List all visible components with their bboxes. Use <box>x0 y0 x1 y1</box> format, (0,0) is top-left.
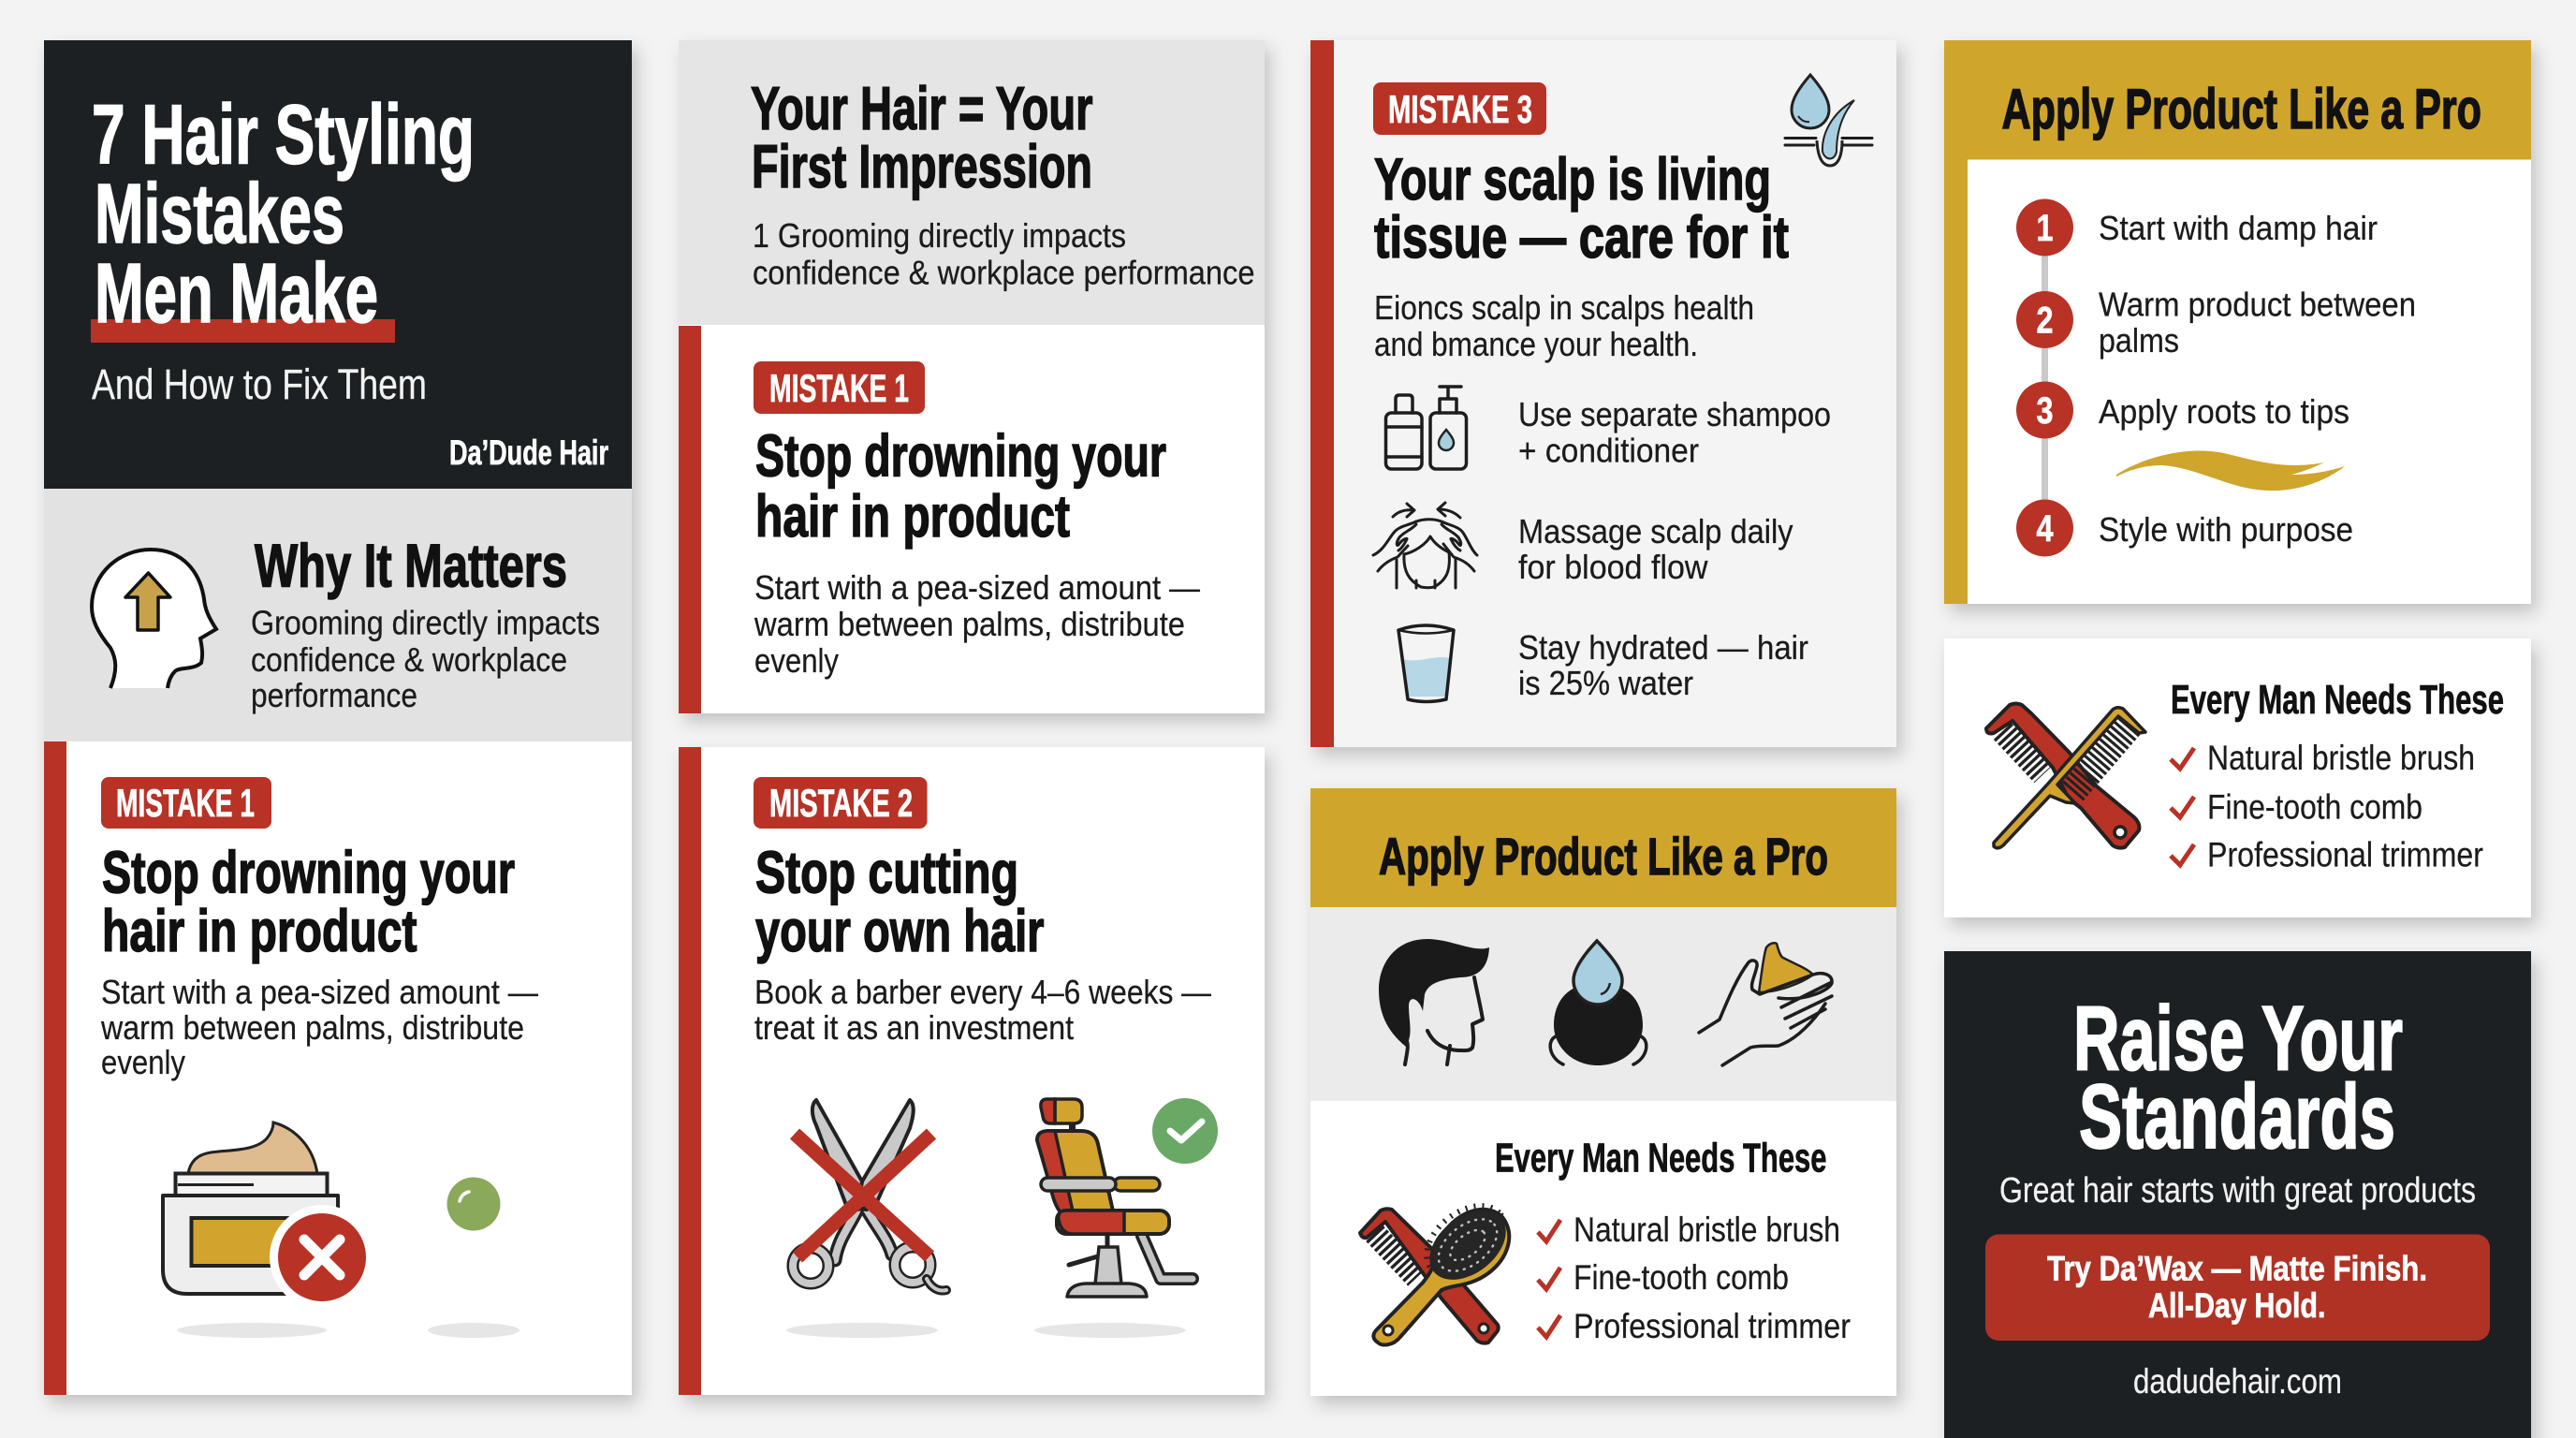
heading <box>102 841 515 964</box>
checklist: Natural bristle brush <box>2207 739 2475 777</box>
body text: warm between palms, distribute <box>100 1008 524 1047</box>
checklist <box>2171 739 2483 874</box>
panel: apply product steps <box>1944 40 2531 604</box>
body text <box>100 973 538 1081</box>
step text: Start with damp hair <box>2099 209 2378 247</box>
panel: first impression <box>679 40 1265 325</box>
icon: product in hand <box>1699 943 1832 1065</box>
badge <box>754 777 927 829</box>
icon: gold hair swoosh <box>2116 451 2345 491</box>
heading: First Impression <box>752 132 1092 200</box>
button: All-Day Hold. <box>2148 1286 2325 1325</box>
badge: MISTAKE 1 <box>116 781 255 825</box>
heading: hair in product <box>755 484 1070 550</box>
list text: separate shampoo: Use separate shampoo <box>1518 395 1831 433</box>
body text: 1 Grooming directly impacts <box>753 216 1126 255</box>
heading <box>2073 987 2403 1167</box>
icon: pea-sized amount <box>428 1178 520 1338</box>
icon: man's head in profile <box>1379 939 1489 1064</box>
body text: Book a barber every 4–6 weeks — <box>754 973 1211 1011</box>
list text: hydration <box>1518 628 1808 702</box>
checklist <box>1538 1211 1851 1345</box>
subtitle: And How to Fix Them <box>92 360 427 408</box>
body text <box>754 568 1200 680</box>
checklist: Natural bristle brush <box>1573 1211 1840 1249</box>
panel: every man needs these, column 3 <box>1310 1101 1896 1396</box>
body text <box>754 973 1211 1047</box>
title underline <box>91 319 395 343</box>
step text: Apply roots to tips <box>2099 392 2349 431</box>
body text: warm between palms, distribute <box>754 605 1185 643</box>
step connector and numbers: 3 <box>2037 390 2054 432</box>
brand name: Da’Dude Hair <box>449 433 608 472</box>
list text: hydration: Stay hydrated — hair <box>1518 628 1808 667</box>
step connector and numbers: 2 <box>2037 300 2054 341</box>
list text: hydration: is 25% water <box>1518 664 1693 702</box>
step connector and numbers <box>2016 198 2073 556</box>
body text: evenly <box>754 641 839 680</box>
checklist: Professional trimmer <box>2207 835 2483 874</box>
panel: title hero <box>44 40 632 489</box>
heading: hair in product <box>102 899 417 964</box>
badge <box>101 777 271 829</box>
icon: crossed combs <box>1986 704 2145 848</box>
heading: Standards <box>2079 1065 2395 1167</box>
panel: mistake 3 card <box>1310 40 1896 747</box>
heading: Apply Product Like a Pro <box>1379 827 1828 886</box>
body text: confidence & workplace performance <box>753 253 1254 292</box>
list text: massage: for blood flow <box>1518 548 1708 586</box>
heading: Stop drowning your <box>102 841 515 906</box>
heading: Every Man Needs These <box>1495 1135 1827 1181</box>
body text: confidence & workplace <box>251 640 567 679</box>
title: 7 Hair Styling <box>92 88 475 182</box>
heading: Stop drowning your <box>755 423 1166 489</box>
badge: MISTAKE 3 <box>1388 87 1532 131</box>
body text: performance <box>251 676 417 714</box>
title <box>92 88 475 341</box>
list text: massage <box>1518 512 1793 586</box>
panel: mistake 1 card, column 2 <box>679 326 1265 713</box>
heading: your own hair <box>755 899 1045 964</box>
panel: call to action <box>1944 951 2531 1438</box>
body text: Eioncs scalp in scalps health <box>1374 288 1754 327</box>
heading <box>755 841 1045 964</box>
body text: and bmance your health. <box>1374 325 1698 363</box>
icon: crossed-out scissors <box>786 1100 946 1338</box>
panel: every man needs these, column 4 <box>1944 638 2531 917</box>
list text: separate shampoo <box>1518 395 1831 470</box>
icon: shampoo and conditioner bottles <box>1385 387 1466 469</box>
body text: treat it as an investment <box>754 1008 1074 1047</box>
heading <box>1374 147 1789 271</box>
panel: mistake 2 card <box>679 747 1265 1395</box>
list text: massage: Massage scalp daily <box>1518 512 1793 550</box>
badge <box>1373 82 1546 135</box>
step text: Style with purpose <box>2099 510 2353 549</box>
heading: Your Hair = Your <box>751 74 1093 142</box>
title: Mistakes <box>95 168 344 261</box>
panel: why it matters <box>44 489 632 741</box>
badge <box>754 361 925 414</box>
body text <box>1374 288 1754 363</box>
button <box>1985 1234 2490 1341</box>
button: Try Da’Wax — Matte Finish. <box>2047 1249 2427 1288</box>
step text <box>2099 209 2416 549</box>
step text: Warm product between <box>2099 285 2416 324</box>
body text: evenly <box>101 1043 185 1081</box>
heading: Stop cutting <box>755 841 1018 906</box>
website: dadudehair.com <box>2133 1362 2342 1401</box>
icon: barber chair with check <box>1034 1098 1218 1338</box>
title: Men Make <box>95 247 378 341</box>
icon: water drop on crown <box>1550 941 1647 1065</box>
icon: comb and brush <box>1360 1192 1519 1344</box>
icon: head with up arrow <box>92 550 216 688</box>
tagline: Great hair starts with great products <box>1999 1171 2476 1211</box>
body text <box>753 216 1254 292</box>
panel: apply product with icons <box>1310 788 1896 1101</box>
icon: product jar with cross <box>163 1123 374 1338</box>
badge: MISTAKE 1 <box>769 366 909 410</box>
heading <box>755 423 1166 550</box>
body text: Start with a pea-sized amount — <box>754 568 1200 607</box>
heading: Raise Your <box>2073 987 2403 1090</box>
icon: glass of water <box>1398 625 1454 702</box>
body text <box>251 603 600 714</box>
icon: water drop and hair follicle <box>1785 75 1872 166</box>
badge: MISTAKE 2 <box>769 781 913 825</box>
step connector and numbers: 4 <box>2037 508 2054 550</box>
body text: Grooming directly impacts <box>251 603 600 642</box>
heading: Why It Matters <box>255 532 567 599</box>
icon: scalp massage <box>1373 503 1477 588</box>
heading: tissue — care for it <box>1374 205 1789 271</box>
checklist: Fine-tooth comb <box>1573 1258 1789 1297</box>
heading <box>751 74 1093 200</box>
step text: palms <box>2099 321 2179 360</box>
heading: Your scalp is living <box>1374 147 1771 213</box>
panel: mistake 1 card, column 1 <box>44 741 632 1395</box>
checklist: Professional trimmer <box>1573 1307 1851 1345</box>
step connector and numbers: 1 <box>2037 208 2054 249</box>
list text: separate shampoo: + conditioner <box>1518 431 1699 470</box>
checklist: Fine-tooth comb <box>2207 788 2422 826</box>
body text: Start with a pea-sized amount — <box>101 973 538 1011</box>
